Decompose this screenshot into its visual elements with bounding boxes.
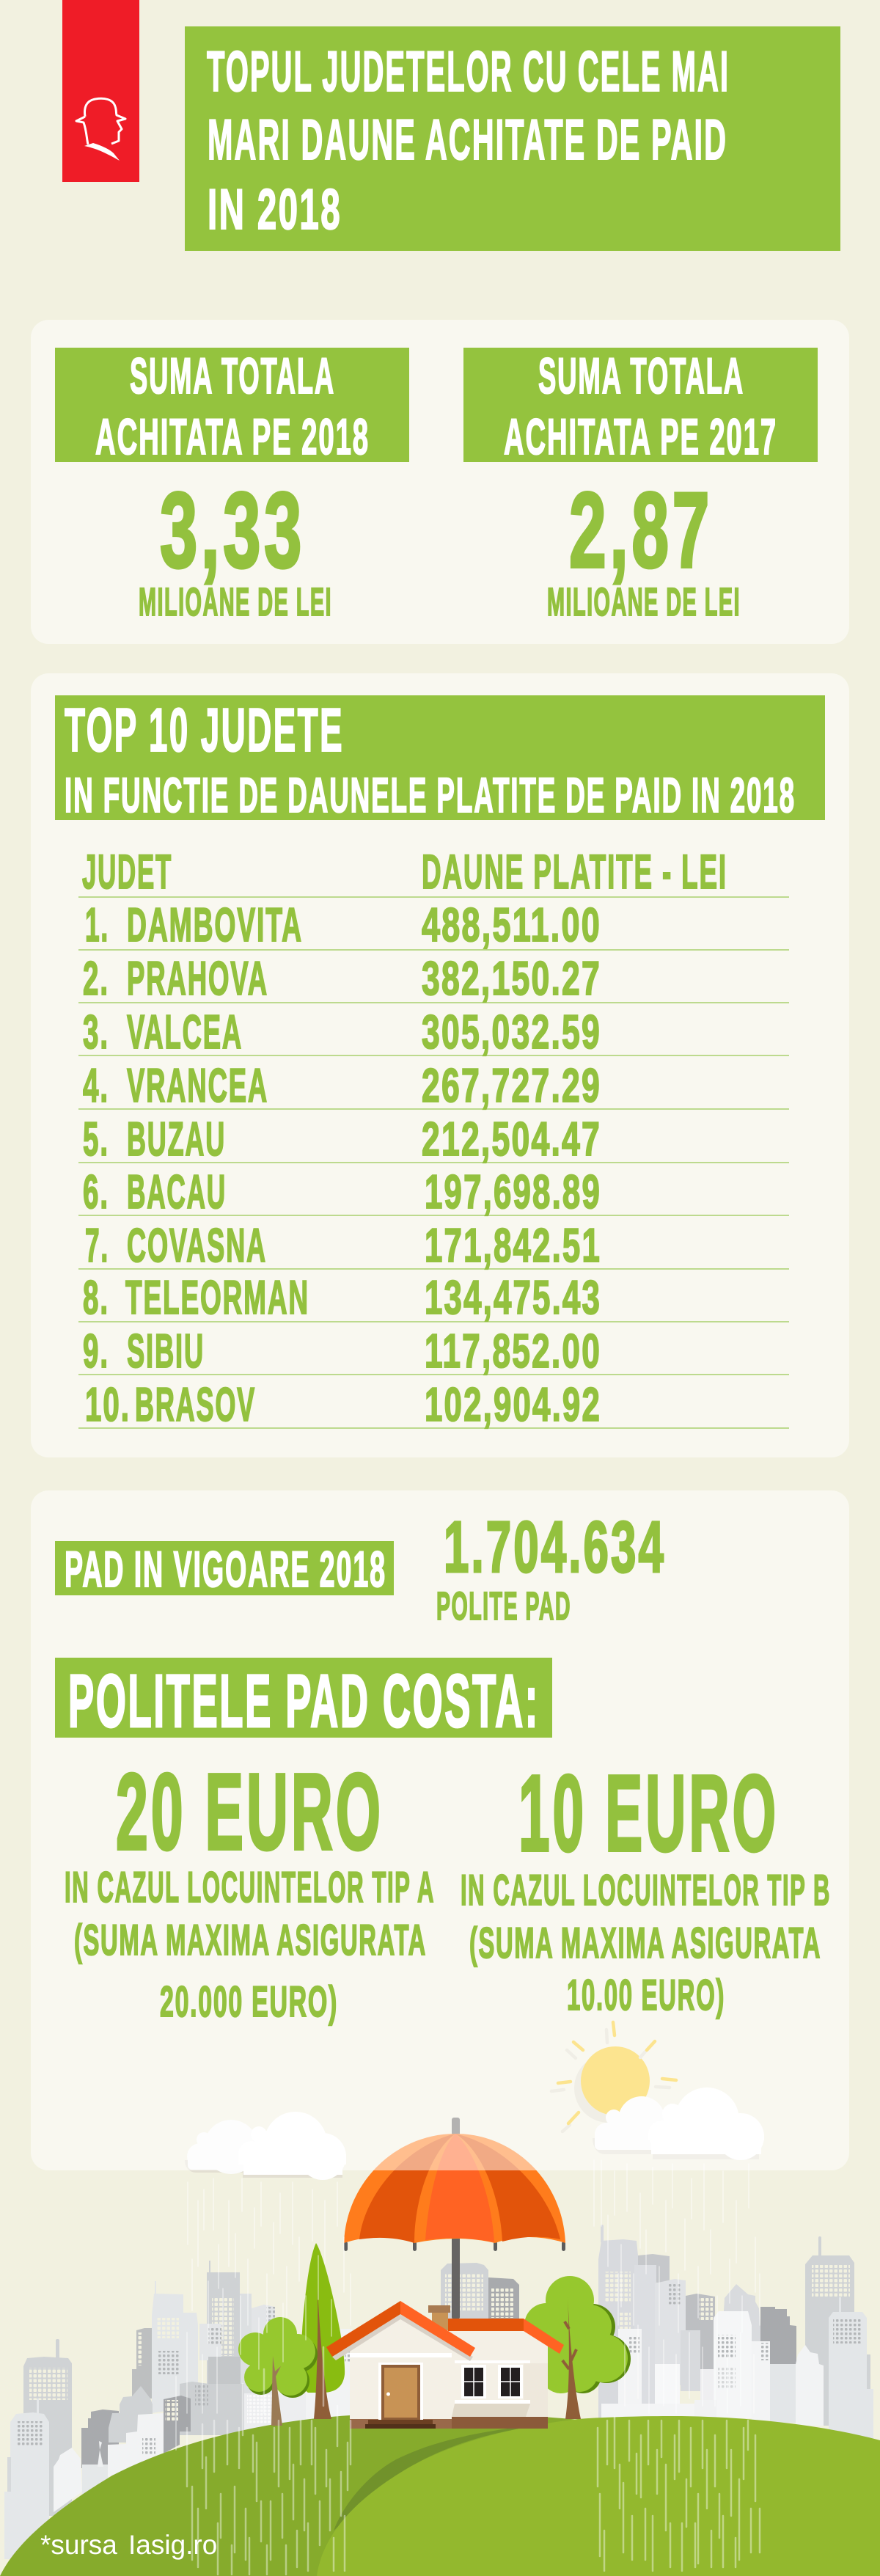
table: JUDET bbox=[82, 844, 172, 899]
heading bbox=[55, 695, 825, 823]
table: 171,842.51 bbox=[425, 1218, 601, 1272]
cost type A: 20.000 EURO) bbox=[160, 1977, 338, 2026]
PAD in force label: PAD IN VIGOARE 2018 bbox=[65, 1541, 386, 1598]
cost type B: 10.00 EURO) bbox=[567, 1971, 725, 2019]
windows bbox=[452, 2360, 530, 2417]
table: 212,504.47 bbox=[422, 1112, 601, 1166]
skyline buildings bbox=[4, 2225, 873, 2559]
table: 305,032.59 bbox=[422, 1005, 601, 1058]
table: VALCEA bbox=[127, 1005, 243, 1058]
tree: cypress bbox=[301, 2243, 345, 2419]
table: BUZAU bbox=[127, 1112, 226, 1166]
table: COVASNA bbox=[127, 1218, 267, 1272]
source credit: *sursa bbox=[40, 2530, 117, 2560]
total 2017 heading bbox=[463, 348, 818, 465]
table: 6. bbox=[83, 1165, 109, 1218]
right skyline bbox=[598, 2225, 873, 2443]
table bbox=[78, 844, 789, 1431]
table: BRASOV bbox=[135, 1377, 256, 1431]
hills bbox=[0, 2413, 880, 2576]
clouds bbox=[185, 2087, 764, 2180]
title banner bbox=[185, 26, 840, 251]
heading: TOP 10 JUDETE bbox=[65, 695, 344, 764]
total 2018 heading: SUMA TOTALA bbox=[130, 348, 335, 404]
table: 8. bbox=[83, 1270, 109, 1324]
cost type A bbox=[65, 1752, 435, 2026]
cost type B bbox=[461, 1753, 831, 2019]
umbrella bbox=[344, 2118, 565, 2319]
table: 3. bbox=[83, 1005, 109, 1058]
table: 2. bbox=[83, 951, 109, 1005]
table: 267,727.29 bbox=[422, 1058, 601, 1112]
title banner: IN 2018 bbox=[208, 177, 342, 241]
sun bbox=[551, 2022, 676, 2132]
rain bbox=[176, 2160, 760, 2575]
door bbox=[378, 2363, 423, 2420]
value 2017 bbox=[547, 470, 741, 624]
illustration: city, umbrella and house bbox=[0, 2022, 880, 2576]
table: 117,852.00 bbox=[425, 1324, 601, 1377]
table: BACAU bbox=[127, 1165, 227, 1218]
panel: PAD policies bbox=[31, 1490, 849, 2170]
cost type A: 20 EURO bbox=[116, 1752, 384, 1873]
total 2018 heading: ACHITATA PE 2018 bbox=[95, 409, 370, 465]
table: TELEORMAN bbox=[125, 1270, 309, 1324]
PAD in force label bbox=[55, 1541, 394, 1598]
table: 134,475.43 bbox=[425, 1270, 601, 1324]
table: 197,698.89 bbox=[425, 1165, 601, 1218]
red logo tab bbox=[62, 0, 139, 182]
table: 5. bbox=[83, 1112, 109, 1166]
heading: policy cost bbox=[55, 1658, 552, 1743]
panel: totals bbox=[31, 320, 849, 644]
table: 1. bbox=[85, 898, 109, 951]
table: DAMBOVITA bbox=[127, 898, 303, 951]
panel: top 10 counties bbox=[31, 673, 849, 1457]
table: PRAHOVA bbox=[127, 951, 268, 1005]
icon: man with hat silhouette bbox=[76, 98, 125, 161]
table: 10. bbox=[85, 1377, 131, 1431]
PAD policies count bbox=[436, 1506, 666, 1628]
chimney bbox=[428, 2305, 450, 2330]
house bbox=[326, 2301, 564, 2429]
left skyline bbox=[4, 2261, 352, 2559]
table: 488,511.00 bbox=[422, 898, 601, 951]
roof bbox=[326, 2301, 564, 2361]
cost type A: IN CAZUL LOCUINTELOR TIP A bbox=[65, 1863, 435, 1911]
value 2018 bbox=[139, 470, 332, 624]
total 2018 heading bbox=[55, 348, 409, 465]
value 2018: MILIOANE DE LEI bbox=[139, 580, 332, 624]
table: 9. bbox=[83, 1324, 109, 1377]
table: 7. bbox=[85, 1218, 109, 1272]
tree: right round bbox=[524, 2276, 631, 2419]
table: 4. bbox=[83, 1058, 109, 1112]
table: VRANCEA bbox=[127, 1058, 268, 1112]
cost type A: (SUMA MAXIMA ASIGURATA bbox=[74, 1916, 427, 1964]
centre skyline bbox=[441, 2263, 519, 2321]
value 2018: 3,33 bbox=[160, 470, 305, 590]
PAD policies count: POLITE PAD bbox=[436, 1584, 571, 1628]
tree: left round bbox=[238, 2317, 318, 2426]
table: 102,904.92 bbox=[425, 1377, 601, 1431]
PAD policies count: 1.704.634 bbox=[444, 1506, 666, 1587]
table: 382,150.27 bbox=[422, 951, 601, 1005]
source credit: Iasig.ro bbox=[128, 2530, 217, 2560]
value 2017: 2,87 bbox=[569, 470, 713, 590]
table: SIBIU bbox=[127, 1324, 205, 1377]
